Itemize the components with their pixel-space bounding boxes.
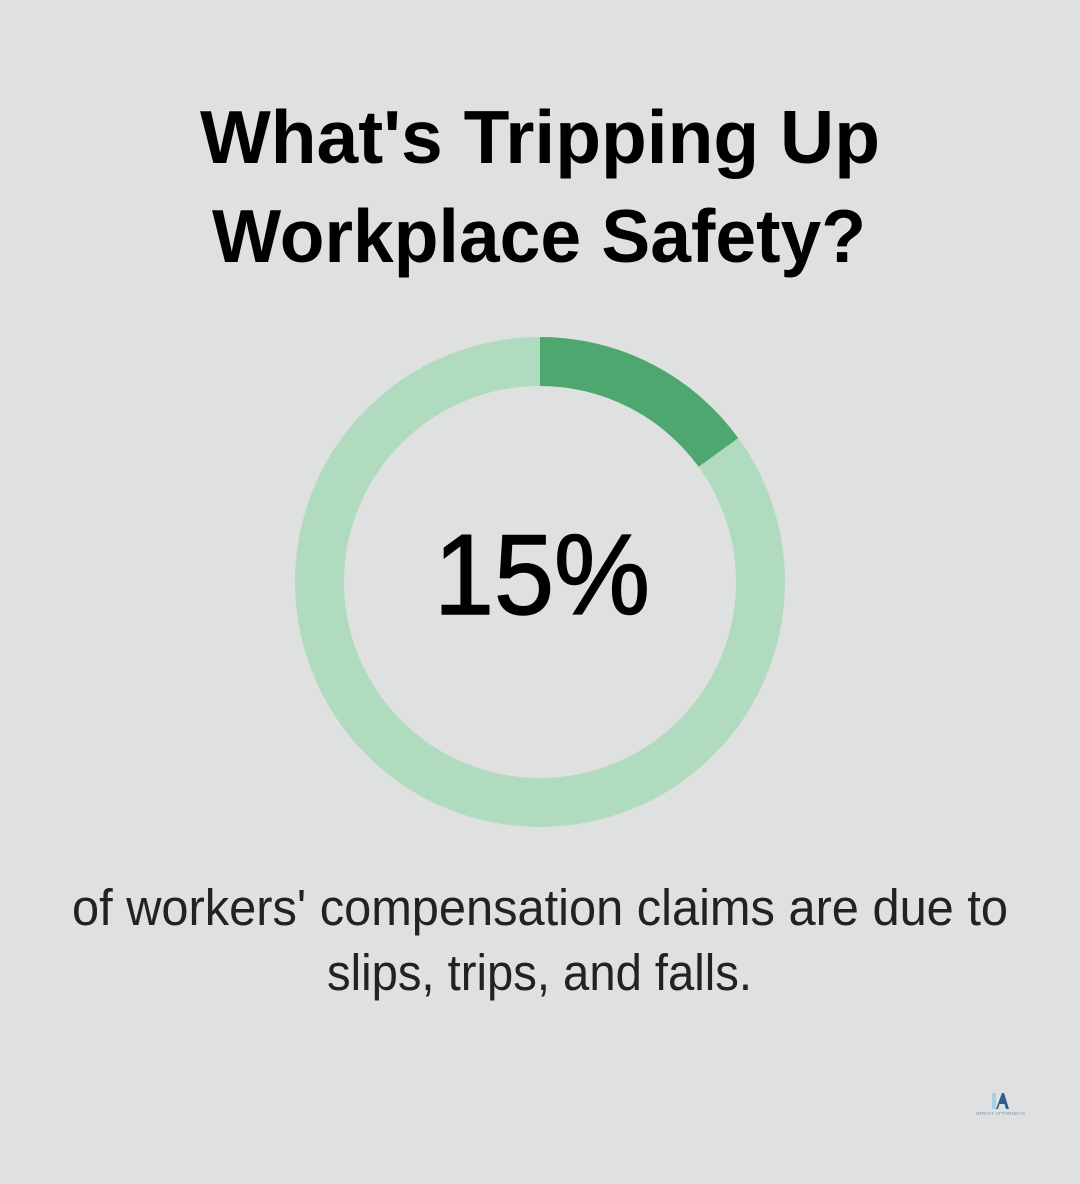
caption: of workers' compensation claims are due to — [72, 879, 1008, 936]
caption: slips, trips, and falls. — [327, 944, 752, 1001]
caption — [72, 879, 1008, 1001]
title: Workplace Safety? — [212, 194, 866, 278]
logo — [976, 1093, 1025, 1116]
donut chart: 15% — [320, 337, 760, 802]
title — [200, 95, 880, 278]
logo: IMPACT ATTORNEYS — [976, 1111, 1025, 1116]
big number: 15% — [434, 512, 650, 639]
title: What's Tripping Up — [200, 95, 880, 179]
